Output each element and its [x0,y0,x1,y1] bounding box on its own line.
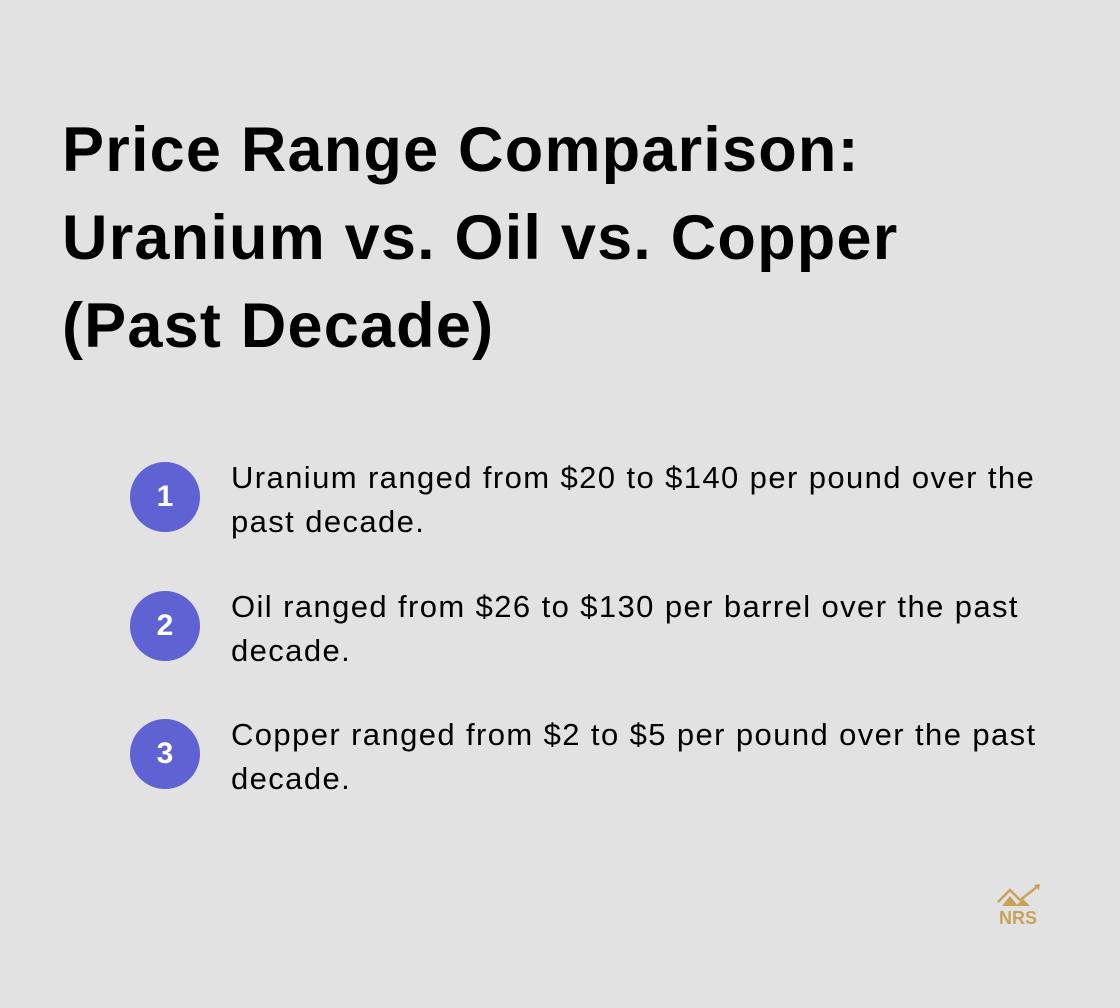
title: Price Range Comparison: [62,115,860,185]
title: Uranium vs. Oil vs. Copper [62,203,898,273]
logo: NRS [997,884,1040,926]
text 2: Oil ranged from $26 to $130 per barrel over the past decade. [231,589,1019,668]
item 1 [130,460,1035,539]
badge 1 [130,462,200,532]
badge 2: 2 [157,609,173,642]
badge 1: 1 [157,480,173,513]
text 1: Uranium ranged from $20 to $140 per pound over the past decade. [231,460,1035,539]
badge 3: 3 [157,737,173,770]
item 2 [130,589,1019,668]
title: (Past Decade) [62,291,494,361]
badge 3 [130,719,200,789]
text 3: Copper ranged from $2 to $5 per pound over the past decade. [231,717,1037,796]
item 3 [130,717,1037,796]
title [62,115,898,361]
badge 2 [130,591,200,661]
